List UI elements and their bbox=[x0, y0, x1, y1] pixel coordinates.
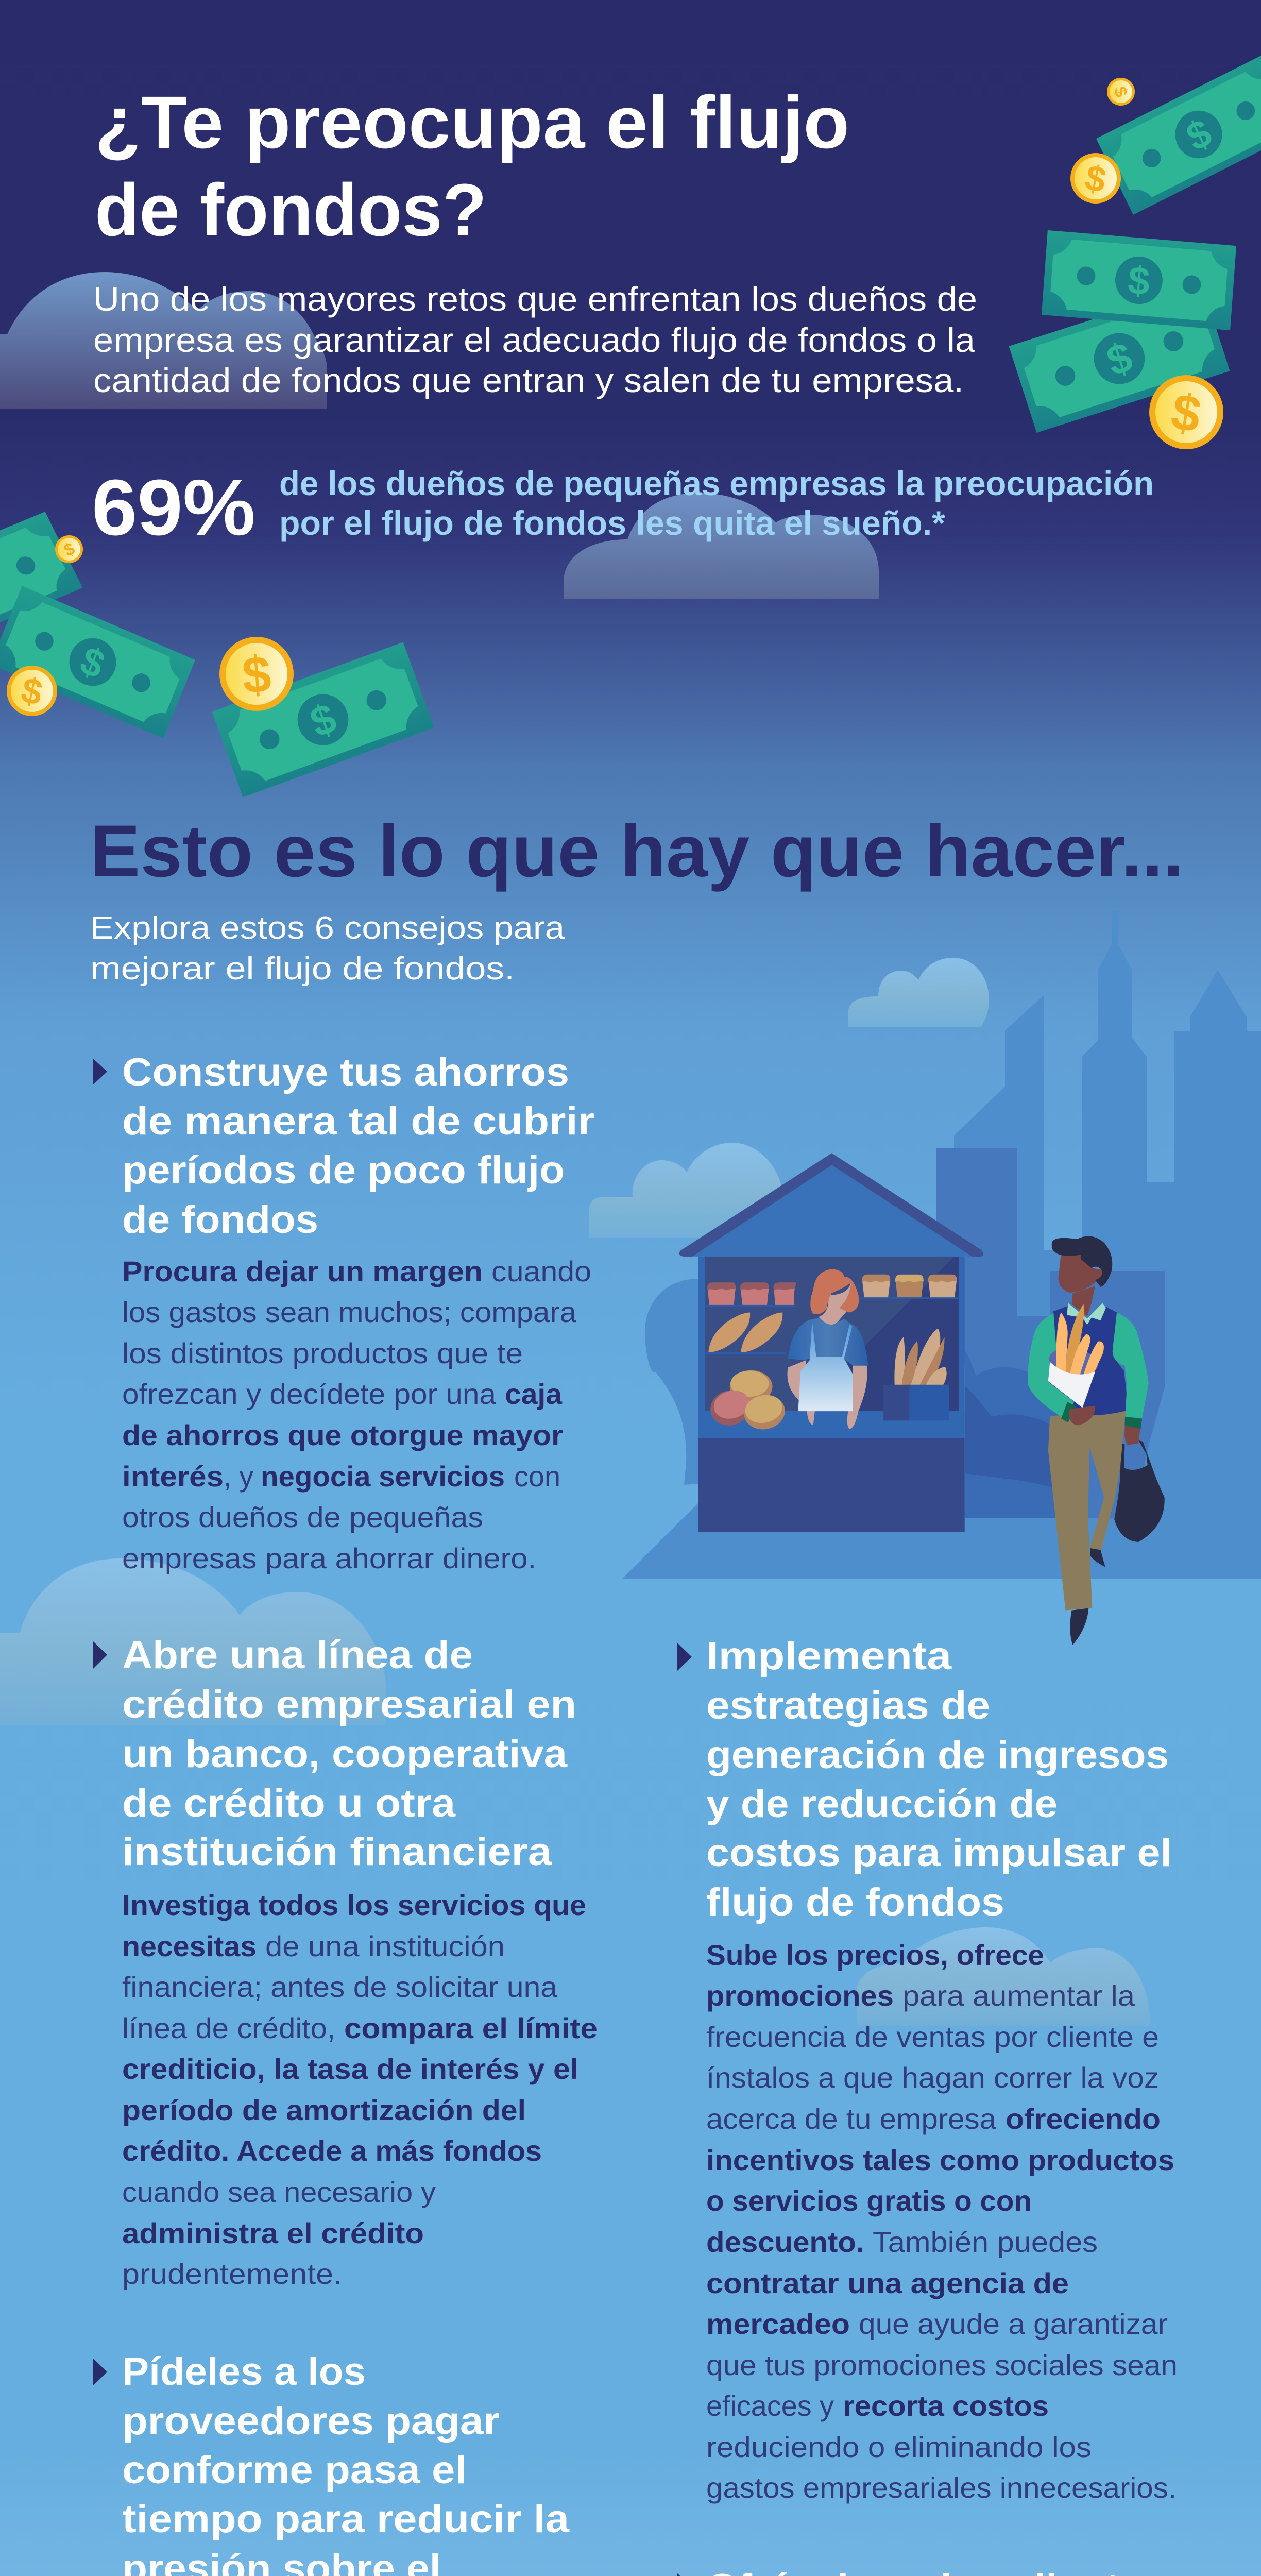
tip 1 body: los gastos sean muchos; compara bbox=[122, 1296, 577, 1328]
tip 2 body: Investiga todos los servicios que bbox=[122, 1889, 586, 1921]
arrow bbox=[677, 2573, 692, 2576]
intro paragraph bbox=[93, 280, 977, 399]
coin large bbox=[1149, 375, 1223, 449]
tip 1 heading: períodos de poco flujo bbox=[122, 1148, 565, 1192]
coin small bbox=[1107, 78, 1135, 106]
bill bbox=[1009, 284, 1230, 433]
bread crate bbox=[883, 1328, 949, 1420]
tip 4 bbox=[677, 1634, 1178, 2504]
tip 2 body: compara el límite bbox=[344, 2012, 598, 2044]
hand right bbox=[1124, 1425, 1140, 1445]
tip 3 heading: tiempo para reducir la bbox=[122, 2497, 570, 2541]
city skyline bbox=[622, 910, 1261, 1579]
cloud: behind statistic bbox=[564, 493, 879, 599]
tip 2 body: necesitas bbox=[122, 1930, 257, 1962]
tip 1 body: negocia servicios bbox=[261, 1460, 505, 1493]
tip 1 body: empresas para ahorrar dinero. bbox=[122, 1542, 536, 1574]
buildings silhouette bbox=[622, 910, 1261, 1579]
cloud: left above tip 2 bbox=[0, 1558, 386, 1725]
tip 4 body: recorta costos bbox=[843, 2389, 1049, 2422]
bill bbox=[1042, 230, 1236, 330]
tip 2 body bbox=[122, 1889, 598, 2290]
tip 1 heading: de manera tal de cubrir bbox=[122, 1099, 594, 1143]
tip 3 bbox=[93, 2350, 597, 2576]
hills behind stall bbox=[965, 1350, 1061, 1518]
sleeves bbox=[1028, 1313, 1149, 1420]
money: left bbox=[0, 512, 434, 798]
tip 4 body bbox=[706, 1939, 1178, 2504]
tip 4 heading: flujo de fondos bbox=[706, 1880, 1004, 1924]
cloud: behind stall bbox=[589, 1143, 784, 1238]
darker building overlay bbox=[936, 1148, 1165, 1518]
section intro: Explora estos 6 consejos para bbox=[90, 910, 565, 946]
tip 3 heading: proveedores pagar bbox=[122, 2399, 500, 2443]
woman vendor bbox=[787, 1269, 868, 1429]
tip 1 body: caja bbox=[505, 1378, 563, 1410]
tip 5 bbox=[677, 2566, 1165, 2576]
tip 4 body: que tus promociones sociales sean bbox=[706, 2349, 1178, 2381]
coin large bbox=[219, 637, 294, 711]
tip 4 heading: estrategias de bbox=[706, 1684, 990, 1727]
bill: $ bbox=[1127, 258, 1151, 304]
tip 4 body: promociones bbox=[706, 1979, 894, 2012]
tip 2 heading: crédito empresarial en bbox=[122, 1683, 576, 1726]
tree behind stall bbox=[645, 1279, 698, 1485]
tip 4 heading: Implementa bbox=[706, 1634, 952, 1678]
stall roof bbox=[683, 1165, 980, 1257]
tip 4 body: Sube los precios, ofrece bbox=[706, 1939, 1044, 1971]
tip 1 heading: Construye tus ahorros bbox=[122, 1050, 569, 1094]
statistic text: por el flujo de fondos les quita el sueño.* bbox=[279, 504, 945, 542]
tip 4 body: contratar una agencia de bbox=[706, 2267, 1069, 2299]
tip 4 body: o servicios gratis o con bbox=[706, 2184, 1032, 2217]
tip 2 body: crediticio, la tasa de interés y el bbox=[122, 2053, 578, 2085]
tip 4 body: También puedes bbox=[873, 2226, 1098, 2258]
tip 2 body: período de amortización del bbox=[122, 2094, 526, 2126]
intro paragraph: empresa es garantizar el adecuado flujo de fondos o la bbox=[93, 321, 975, 359]
shelves bbox=[705, 1297, 959, 1354]
tip 2 body: línea de crédito, bbox=[122, 2012, 335, 2044]
tip 3 heading bbox=[122, 2350, 572, 2576]
neck and face bbox=[1058, 1252, 1102, 1316]
tip 2 body: cuando sea necesario y bbox=[122, 2176, 436, 2208]
tip 4 body: ínstalos a que hagan correr la voz bbox=[706, 2061, 1159, 2094]
coin small bbox=[55, 535, 83, 563]
tip 3 heading: conforme pasa el bbox=[122, 2448, 467, 2492]
tip 2 bbox=[93, 1633, 598, 2290]
tip 2 body: crédito. Accede a más fondos bbox=[122, 2134, 542, 2167]
shopping bag bbox=[1114, 1440, 1165, 1542]
tip 3 heading: Pídeles a los bbox=[122, 2350, 366, 2394]
tip 2 heading: institución financiera bbox=[122, 1830, 552, 1874]
coin medium bbox=[7, 666, 57, 716]
tip 4 body: incentivos tales como productos bbox=[706, 2144, 1174, 2176]
tip 1 body: , y bbox=[224, 1460, 253, 1493]
potatoes bbox=[706, 1370, 788, 1433]
arrow bbox=[93, 1058, 107, 1085]
tip 4 heading: y de reducción de bbox=[706, 1782, 1058, 1826]
tip 2 heading: de crédito u otra bbox=[122, 1782, 456, 1825]
tip 4 heading bbox=[706, 1634, 1172, 1924]
loaves left bbox=[707, 1282, 796, 1305]
cuffs bbox=[1061, 1402, 1142, 1429]
title bbox=[95, 81, 849, 251]
tip 4 body: eficaces y bbox=[706, 2389, 834, 2422]
tip 4 body: frecuencia de ventas por cliente e bbox=[706, 2021, 1159, 2053]
section heading: Esto es lo que hay que hacer... bbox=[90, 810, 1184, 892]
section intro: mejorar el flujo de fondos. bbox=[90, 951, 515, 987]
loaves right bbox=[862, 1275, 957, 1297]
coin medium: $ bbox=[1082, 157, 1110, 200]
tip 1 body bbox=[122, 1255, 591, 1574]
tip 2 body: de una institución bbox=[265, 1930, 505, 1962]
tip 1 body: cuando bbox=[491, 1255, 591, 1287]
tip 4 heading: costos para impulsar el bbox=[706, 1831, 1172, 1875]
hair bbox=[1052, 1236, 1112, 1287]
money: top right bbox=[1009, 54, 1261, 449]
tip 1 bbox=[93, 1050, 594, 1574]
bill: $ bbox=[1101, 333, 1138, 385]
statistic text: de los dueños de pequeñas empresas la preocupación bbox=[279, 464, 1154, 502]
tip 1 body: Procura dejar un margen bbox=[122, 1255, 483, 1287]
stall counter front bbox=[698, 1438, 965, 1532]
tip 2 heading bbox=[122, 1633, 576, 1874]
bill bbox=[1096, 54, 1261, 215]
trousers bbox=[1048, 1409, 1126, 1611]
title: ¿Te preocupa el flujo bbox=[95, 81, 849, 164]
statistic: 69% bbox=[92, 463, 1154, 552]
market stall bbox=[679, 1153, 983, 1532]
tip 2 body: prudentemente. bbox=[122, 2258, 342, 2290]
arrow bbox=[93, 1641, 107, 1669]
stall counter top bbox=[698, 1411, 965, 1438]
tip 2 body: financiera; antes de solicitar una bbox=[122, 1971, 558, 2003]
tip 4 body: ofreciendo bbox=[1006, 2103, 1161, 2135]
tip 1 heading: de fondos bbox=[122, 1198, 318, 1242]
bill: $ bbox=[74, 638, 111, 687]
cloud: behind tip 4 body bbox=[857, 1927, 1150, 2026]
bill bbox=[0, 512, 82, 660]
tip 2 heading: Abre una línea de bbox=[122, 1633, 473, 1677]
tip 1 body: con bbox=[514, 1460, 560, 1493]
hand left bbox=[1069, 1406, 1095, 1425]
paper bag and bread bbox=[1047, 1304, 1104, 1408]
cloud: above city bbox=[848, 958, 989, 1027]
intro paragraph: Uno de los mayores retos que enfrentan los dueños de bbox=[93, 280, 977, 318]
coin large: $ bbox=[240, 645, 273, 705]
tip 4 heading: generación de ingresos bbox=[706, 1733, 1169, 1777]
coin large: $ bbox=[1167, 382, 1205, 444]
bill bbox=[212, 642, 434, 798]
man with groceries bbox=[1028, 1236, 1165, 1645]
tip 1 body: los distintos productos que te bbox=[122, 1337, 523, 1369]
bill: $ bbox=[1180, 110, 1218, 160]
intro paragraph: cantidad de fondos que entran y salen de tu empresa. bbox=[93, 361, 964, 399]
tip 1 heading bbox=[122, 1050, 594, 1242]
tip 4 body: que ayude a garantizar bbox=[859, 2308, 1168, 2340]
title: de fondos? bbox=[95, 168, 487, 251]
cloud: top left bbox=[0, 272, 327, 409]
tip 1 body: interés bbox=[122, 1460, 224, 1493]
arrow bbox=[93, 2358, 107, 2386]
collar bbox=[1067, 1303, 1106, 1325]
stall interior bbox=[705, 1257, 959, 1411]
coin medium bbox=[1070, 153, 1121, 204]
shoes bbox=[1070, 1548, 1105, 1645]
tip 4 body: descuento. bbox=[706, 2226, 864, 2258]
tip 4 body: para aumentar la bbox=[902, 1979, 1135, 2012]
baguettes on shelf bbox=[708, 1313, 782, 1352]
tip 2 body: administra el crédito bbox=[122, 2217, 424, 2249]
tip 2 heading: un banco, cooperativa bbox=[122, 1732, 568, 1776]
tip 4 body: acerca de tu empresa bbox=[706, 2103, 997, 2135]
section intro bbox=[90, 910, 565, 987]
statistic: 69%: 69% bbox=[92, 463, 255, 552]
bill: $ bbox=[304, 694, 342, 747]
bill bbox=[0, 586, 195, 738]
statistic text bbox=[279, 464, 1154, 542]
tip 1 body: de ahorros que otorgue mayor bbox=[122, 1419, 563, 1451]
vest bbox=[1053, 1306, 1129, 1416]
coin medium: $ bbox=[18, 670, 46, 713]
tip 1 body: ofrezcan y decídete por una bbox=[122, 1378, 497, 1410]
coin small: $ bbox=[1110, 84, 1131, 100]
arrow bbox=[677, 1643, 692, 1671]
coin small: $ bbox=[61, 539, 78, 561]
tip 4 body: mercadeo bbox=[706, 2308, 850, 2340]
tip 4 body: gastos empresariales innecesarios. bbox=[706, 2471, 1177, 2504]
tip 1 body: otros dueños de pequeñas bbox=[122, 1501, 483, 1533]
tip 4 body: reduciendo o eliminando los bbox=[706, 2431, 1092, 2463]
stall body bbox=[698, 1257, 965, 1438]
